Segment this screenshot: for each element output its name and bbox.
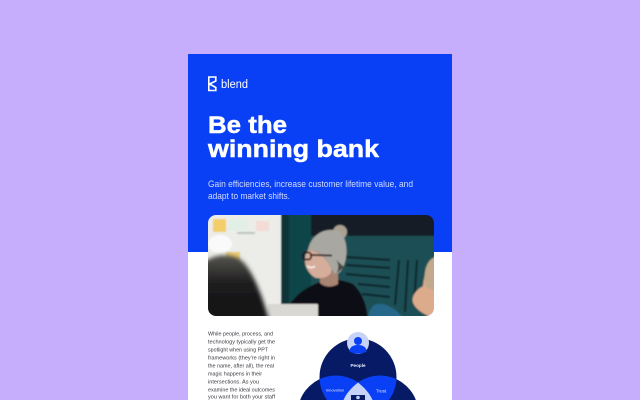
- top icon: person badge: [347, 332, 369, 354]
- right person's hair: [423, 256, 434, 290]
- label: innovation: Innovation: [326, 388, 344, 392]
- dark upper wall: [310, 215, 434, 236]
- label: people: People: [350, 363, 366, 368]
- woman's neck: [320, 272, 338, 287]
- photo background: [310, 235, 434, 316]
- body paragraph: intersections. As you: [208, 380, 259, 386]
- logo wordmark: blend: [221, 79, 248, 91]
- overlap: innovation: [320, 376, 358, 400]
- woman's face: [305, 250, 332, 278]
- laptop: [268, 302, 320, 316]
- blue chair: [368, 303, 402, 316]
- circle: technology: [344, 376, 416, 400]
- body paragraph: frameworks (they're right in: [208, 356, 275, 362]
- circle: process: [300, 376, 372, 400]
- logo mark: [209, 77, 216, 90]
- subtitle: adapt to market shifts.: [208, 190, 290, 201]
- blue hero panel: [188, 54, 452, 252]
- body paragraph: magic happens in their: [208, 372, 262, 378]
- shield body: [351, 395, 365, 400]
- person on the right: [411, 276, 434, 316]
- woman's body: [290, 280, 368, 316]
- body paragraph: the name, after all), the real: [208, 364, 274, 370]
- title: [207, 112, 379, 163]
- sticky notes: [213, 219, 269, 262]
- page background: [188, 54, 452, 400]
- whiteboard: [208, 215, 282, 316]
- badge background: [347, 332, 369, 354]
- glasses: [303, 252, 332, 260]
- subtitle: Gain efficiencies, increase customer lifetime value, and: [208, 178, 413, 189]
- slatted wall: [346, 257, 417, 312]
- venn diagram: [300, 332, 416, 400]
- smile: [307, 266, 315, 268]
- title: Be the: [208, 112, 287, 139]
- shield dot: [356, 396, 360, 399]
- label: trust: Trust: [376, 388, 387, 394]
- centre icon: shield: [351, 395, 365, 400]
- overlap: trust: [358, 376, 396, 400]
- teal column: [288, 215, 312, 303]
- photo: woman smiling in a meeting: [208, 215, 434, 316]
- woman's hair: [308, 230, 347, 274]
- title: winning bank: [207, 136, 379, 163]
- body paragraph: [208, 332, 276, 400]
- woman's bun: [333, 225, 347, 239]
- body paragraph: spotlight when using PPT: [208, 348, 268, 354]
- person head: [354, 337, 362, 345]
- body paragraph: technology typically get the: [208, 340, 276, 346]
- circle: people: [320, 338, 396, 400]
- infographic canvas: [188, 54, 452, 400]
- subtitle: [208, 178, 413, 201]
- white blur near foreground person: [208, 235, 232, 253]
- logo: [209, 77, 248, 91]
- body paragraph: While people, process, and: [208, 332, 273, 338]
- foreground person's dark hair: [204, 255, 269, 320]
- hair shadow: [336, 260, 344, 274]
- centre light segment: [344, 382, 372, 400]
- person shoulders: [350, 345, 366, 354]
- body paragraph: examine the ideal outcomes: [208, 388, 275, 394]
